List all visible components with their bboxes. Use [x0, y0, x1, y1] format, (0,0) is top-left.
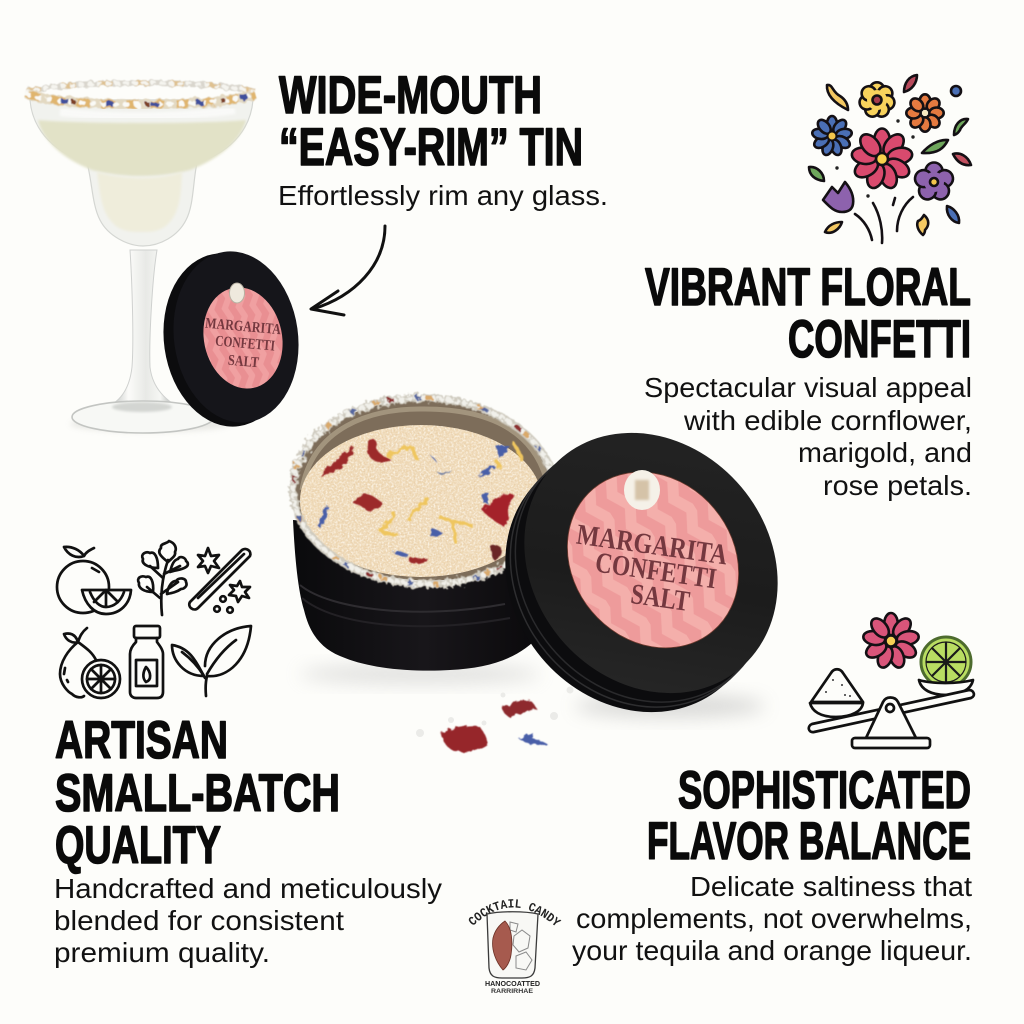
small logo [624, 470, 660, 510]
text: floral confetti: rose petals. [823, 470, 972, 501]
small logo [230, 283, 244, 303]
lid label text: CONFETTI [215, 333, 276, 355]
silver rim front [330, 555, 500, 582]
cilantro sprig [138, 541, 188, 615]
lid label text: CONFETTI [593, 547, 718, 595]
glass bowl [30, 100, 253, 246]
margarita glass [27, 83, 255, 433]
text: flavor balance: your tequila and orange liqueur. [572, 935, 972, 966]
text: flavor balance: Delicate saltiness that [690, 871, 972, 902]
tulip [823, 182, 853, 212]
lid label text: SALT [227, 353, 260, 371]
text: easy-rim tin: Effortlessly rim any glass. [278, 180, 608, 211]
logo caption: HANOCOATTED [485, 979, 541, 988]
rose petals [320, 439, 513, 564]
arrow [311, 226, 385, 315]
logo ice [510, 922, 532, 970]
heading: small batch: QUALITY [55, 816, 221, 875]
text: small batch [54, 873, 442, 968]
lid label text [575, 519, 730, 618]
logo glass [487, 912, 538, 978]
lid label [532, 437, 774, 683]
lid label text [205, 316, 282, 371]
lid label text: SALT [629, 578, 692, 618]
icon: floral confetti [809, 75, 971, 243]
salted tin rim [290, 393, 558, 589]
heading: flavor balance [647, 761, 971, 871]
marigold petals [380, 444, 522, 542]
icon: herbs and citrus [57, 541, 251, 698]
text: flavor balance: complements, not overwhelms, [576, 903, 972, 934]
tin inner wall [290, 395, 558, 587]
text: floral confetti [644, 372, 972, 501]
text: small batch: Handcrafted and meticulously [54, 873, 442, 904]
stem [114, 250, 172, 403]
heading: floral confetti [645, 258, 971, 369]
orange flower [906, 94, 944, 132]
yellow flower [858, 82, 896, 119]
lime slice [921, 637, 971, 687]
small tin lid [153, 243, 309, 435]
heading: small batch: SMALL-BATCH [55, 764, 340, 823]
large pink flower [851, 128, 913, 190]
heading: small batch [55, 711, 340, 875]
lemon with slice [60, 628, 120, 698]
text: flavor balance [572, 871, 972, 966]
brand logo: RARRIRHAE [491, 988, 534, 995]
icon: balance scale [809, 613, 974, 748]
text: floral confetti: Spectacular visual appeal [644, 372, 972, 403]
purple flower [913, 162, 955, 203]
open tin of salt [290, 393, 558, 684]
text: floral confetti: marigold, and [798, 437, 972, 468]
text: small batch: blended for consistent [54, 905, 344, 936]
fulcrum [866, 698, 916, 738]
heading: easy-rim tin [279, 66, 583, 177]
flower on scale [862, 613, 920, 670]
foot [72, 401, 214, 433]
dots [835, 119, 915, 198]
brand logo: COCKTAIL CANDY [468, 899, 562, 926]
text: small batch: premium quality. [54, 937, 270, 968]
cocktail liquid [38, 120, 246, 176]
stems [855, 197, 913, 243]
heading: easy-rim tin: “EASY-RIM” TIN [279, 118, 583, 177]
salted rim [27, 83, 255, 104]
spilled petals and salt [416, 686, 574, 752]
tea leaves [172, 626, 251, 696]
cornflower petals [318, 446, 510, 556]
lid label [194, 280, 292, 396]
salt bowl and pile [811, 669, 863, 702]
confetti petals [809, 75, 971, 235]
salt jar [130, 626, 163, 698]
lid label text: MARGARITA [575, 519, 730, 571]
logo leaf [493, 921, 512, 970]
tin body [293, 520, 555, 671]
cinnamon and star anise [189, 548, 250, 613]
beam [809, 690, 974, 732]
lid label text: MARGARITA [205, 316, 282, 338]
lime bowl [919, 680, 973, 695]
brand logo [468, 899, 562, 995]
salt fill [300, 425, 542, 577]
heading: easy-rim tin: WIDE-MOUTH [279, 66, 542, 125]
heading: small batch: ARTISAN [55, 711, 228, 770]
orange with slice [57, 547, 131, 614]
text: floral confetti: with edible cornflower, [683, 405, 972, 436]
blue flower [811, 116, 853, 157]
large tin lid [453, 381, 830, 764]
